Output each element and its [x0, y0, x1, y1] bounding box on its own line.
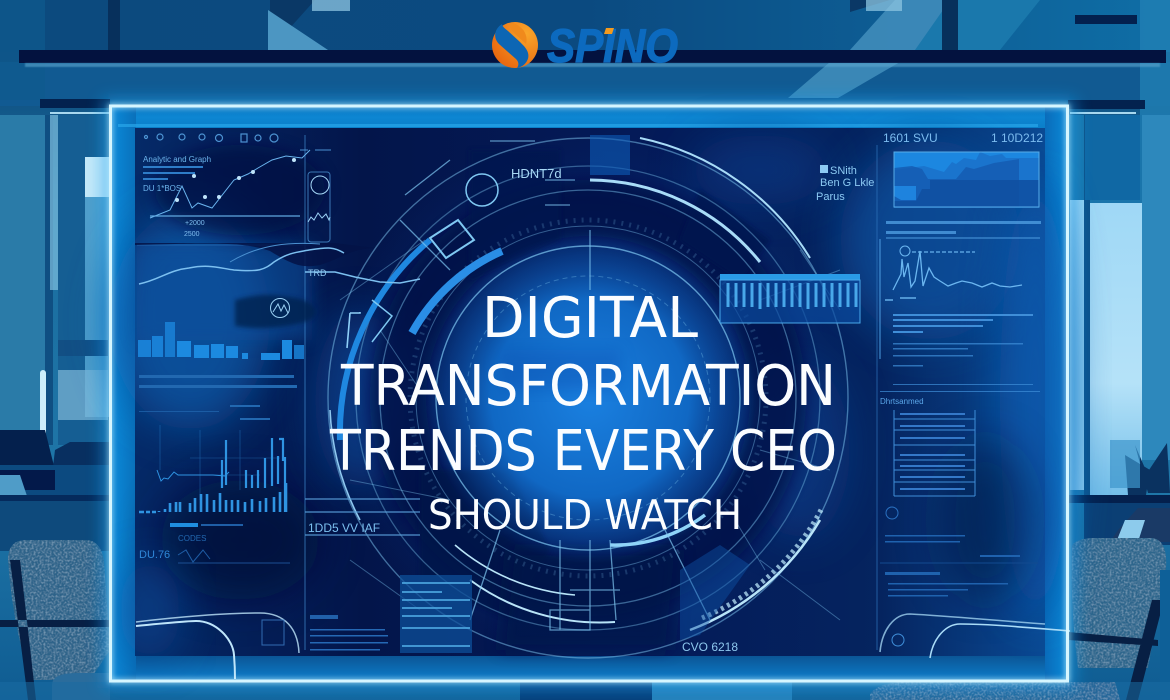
right chart caption — [880, 221, 1041, 359]
wave label: TRD — [308, 268, 327, 278]
left armchair — [0, 540, 110, 700]
right paragraph rows — [880, 314, 1040, 392]
small chart caption: Analytic and Graph — [143, 155, 211, 164]
top-right heading labels — [883, 131, 1043, 145]
top-right handwritten notes — [816, 165, 874, 203]
bottom-left spike chart — [139, 425, 286, 512]
small chart value: DU 1*BOS — [143, 184, 181, 193]
bottom-left curved console — [136, 613, 299, 679]
bottom-left id label — [305, 499, 420, 535]
title line 3: TRENDS EVERY CEO — [329, 419, 837, 484]
title — [329, 286, 837, 539]
left line chart panel: +2000 — [185, 220, 205, 227]
right desk with plant — [1068, 440, 1170, 545]
right line chart — [885, 246, 1022, 300]
left text rows — [139, 375, 297, 420]
panel id left: 1601 SVU — [883, 131, 938, 145]
left desk with laptop — [0, 430, 110, 551]
bottom-left legend: CODES — [178, 534, 206, 543]
ring data label top: HDNT7d — [511, 166, 562, 181]
legend value: DU.76 — [139, 549, 170, 561]
neon frame — [110, 106, 1068, 681]
lower-right curved console — [880, 614, 1070, 658]
title line 1: DIGITAL — [482, 286, 698, 351]
bottom-left text note — [310, 615, 388, 650]
left line chart panel — [137, 134, 331, 650]
top-right handwritten notes: Ben G Lkle — [820, 177, 874, 189]
top-right handwritten notes: SNith — [830, 165, 857, 177]
panel: central dashboard screen — [110, 128, 1070, 660]
logo dot — [604, 28, 614, 34]
left wall with columns — [0, 115, 110, 445]
right table — [880, 397, 975, 496]
logo mark — [492, 22, 538, 68]
circular hud graphic — [323, 133, 853, 663]
right armchair — [1068, 538, 1170, 700]
neon frame glow — [110, 106, 1068, 681]
left line chart panel: 2500 — [184, 231, 200, 238]
top-right area chart — [894, 152, 1039, 208]
title line 2: TRANSFORMATION — [340, 354, 836, 419]
panel id right: 1 10D212 — [991, 131, 1043, 145]
right wall and window — [1068, 115, 1170, 503]
ring data label bottom: CVO 6218 — [682, 640, 738, 654]
left bar chart — [138, 322, 304, 360]
panel: screen bezel — [110, 106, 1068, 681]
table heading: Dhrtsanmed — [880, 397, 924, 406]
top-right data table — [720, 274, 860, 323]
lower-right note — [877, 145, 1038, 650]
bottom floor strip — [0, 682, 1170, 700]
logo — [492, 19, 678, 72]
header beam — [19, 50, 1166, 67]
bottom-left legend — [139, 523, 290, 563]
wave band — [135, 243, 420, 348]
title line 4: SHOULD WATCH — [428, 491, 742, 539]
lower beam — [40, 99, 1145, 114]
top-right handwritten notes: Parus — [816, 191, 845, 203]
bottom-left id label: 1DD5 VV IAF — [308, 521, 380, 535]
logo wordmark: SPINO — [547, 19, 678, 72]
